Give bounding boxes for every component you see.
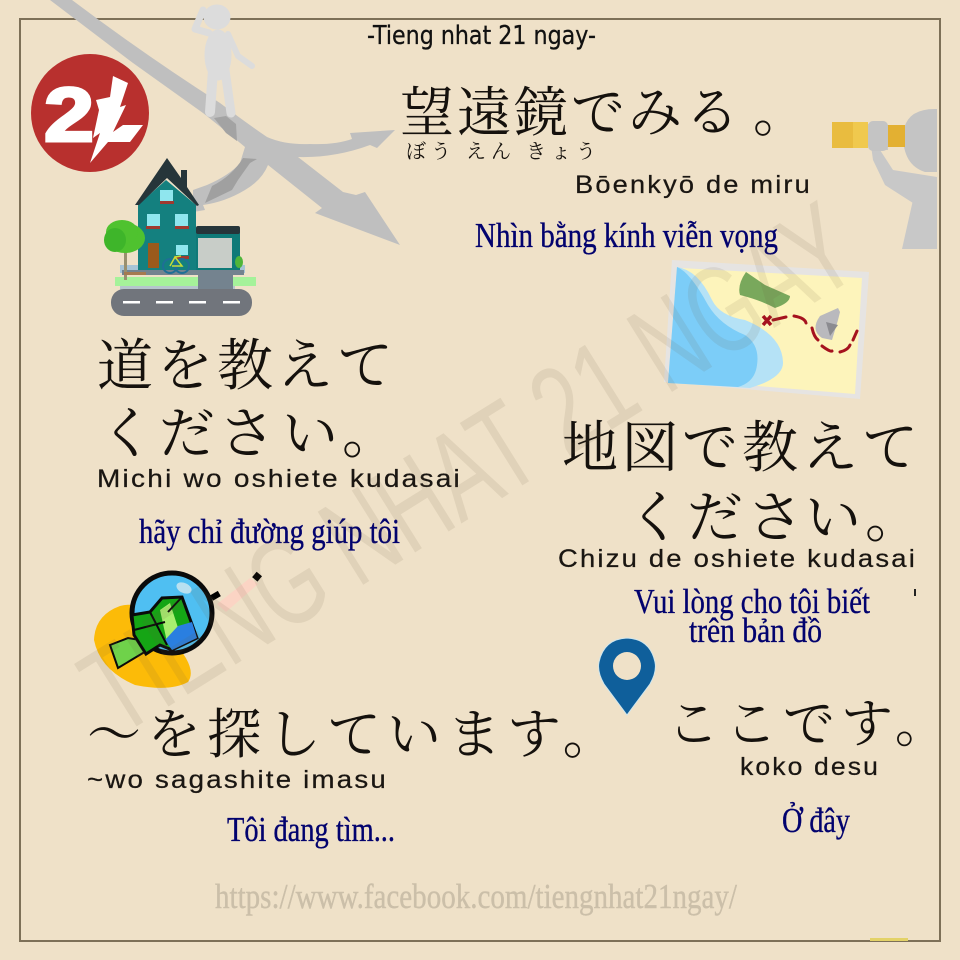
figure standing on road <box>195 5 252 113</box>
phrase: koko desu: koko desu <box>740 753 880 781</box>
phrase: bōenkyō <box>400 70 812 255</box>
phrase: michi: 道を教えて <box>97 322 397 402</box>
phrase: sagashite: Tôi đang tìm... <box>227 810 395 849</box>
phrase: sagashite: ～を探しています。 <box>87 692 623 769</box>
phrase: koko desu: Ở đây <box>782 801 850 840</box>
phrase: michi: hãy chỉ đường giúp tôi <box>139 512 400 551</box>
phrase: bōenkyō: Bōenkyō de miru <box>575 171 812 199</box>
phrase: koko desu: ここです。 <box>667 682 953 757</box>
phrase: chizu: 地図で教えて <box>562 404 922 484</box>
logo 21 <box>31 54 149 172</box>
logo 21: 2 <box>44 73 94 158</box>
phrase: michi: くださ <box>99 390 279 470</box>
icon: house <box>104 158 256 316</box>
small corner mark <box>870 938 908 941</box>
phrase: bōenkyō: 。 <box>753 70 807 147</box>
phrase: chizu <box>558 404 925 650</box>
icon: map under magnifying glass <box>94 572 262 688</box>
facebook url: https://www.facebook.com/tiengnhat21ngay/ <box>215 877 737 916</box>
phrase: koko desu <box>667 682 953 840</box>
phrase: bōenkyō: 望遠鏡でみる <box>400 70 742 147</box>
phrase: chizu: くださ <box>627 474 807 554</box>
phrase: sagashite: ~wo sagashite imasu <box>87 766 388 794</box>
phrase: michi: い。 <box>282 390 402 470</box>
phrase: chizu: Chizu de oshiete kudasai <box>558 545 917 573</box>
icon: location pin <box>599 638 655 715</box>
title: -Tieng nhat 21 ngay- <box>367 21 596 51</box>
phrase: chizu: Vui lòng cho tôi biết <box>634 582 870 621</box>
phrase: bōenkyō: Nhìn bằng kính viễn vọng <box>475 216 778 255</box>
icon: figure with telescope <box>832 109 937 249</box>
phrase: sagashite <box>87 692 623 849</box>
road arrows <box>50 0 400 245</box>
phrase: chizu: い。 <box>805 474 925 554</box>
icon: treasure map <box>664 260 869 399</box>
phrase: chizu: trên bản đồ <box>689 611 822 650</box>
phrase: bōenkyō: ぼう えん きょう <box>406 135 596 164</box>
phrase: michi <box>97 322 462 551</box>
phrase: michi: Michi wo oshiete kudasai <box>97 465 462 493</box>
